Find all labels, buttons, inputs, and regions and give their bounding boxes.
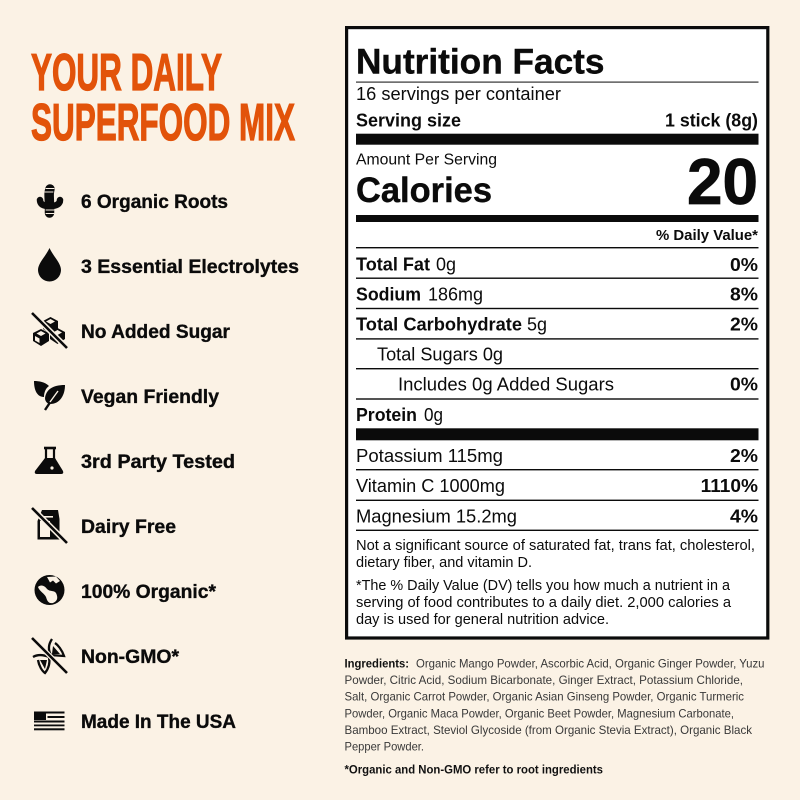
icon: ginger root — [40, 188, 60, 214]
row: total fat: 0% — [730, 254, 758, 275]
row: protein: Protein — [356, 404, 417, 425]
ingredients: Powder, Citric Acid, Sodium Bicarbonate, Ginger Extract, Potassium Chloride, — [344, 673, 743, 687]
label: Vegan Friendly: Vegan Friendly — [81, 386, 219, 408]
serving size: 1 stick (8g) — [665, 110, 758, 130]
row: total fat: 0g — [436, 254, 456, 274]
row: vitamin c — [356, 475, 758, 496]
row: added sugars: Includes 0g Added Sugars — [398, 374, 614, 395]
row: total sugars: Total Sugars 0g — [377, 344, 503, 365]
row: sodium: 186mg — [428, 284, 483, 305]
label: 100% Organic: 100% Organic* — [81, 581, 216, 603]
label: 3rd Party Tested: 3rd Party Tested — [81, 451, 235, 473]
ingredients: Salt, Organic Carrot Powder, Organic Asian Ginseng Powder, Organic Turmeric — [344, 690, 744, 704]
row: vitamin c: Vitamin C 1000mg — [356, 475, 505, 496]
daily value header: % Daily Value* — [656, 228, 758, 244]
row: magnesium: Magnesium 15.2mg — [356, 506, 517, 526]
row: total fat — [356, 254, 758, 275]
row: total fat: Total Fat — [356, 254, 430, 274]
row: potassium: Potassium 115mg — [356, 445, 503, 466]
row: potassium: 2% — [730, 445, 758, 466]
label: Dairy Free: Dairy Free — [81, 516, 176, 538]
calories: 20 — [687, 145, 758, 218]
row: magnesium: 4% — [730, 506, 758, 526]
row: total carbohydrate — [356, 314, 758, 335]
ingredients: Organic Mango Powder, Ascorbic Acid, Organic Ginger Powder, Yuzu — [416, 656, 764, 670]
row: vitamin c: 1110% — [701, 475, 758, 496]
row: protein: 0g — [424, 404, 443, 425]
row: added sugars: 0% — [730, 374, 758, 395]
row: total carbohydrate: Total Carbohydrate — [356, 314, 522, 335]
icon: vegan leaf — [34, 381, 65, 410]
label: 3 Essential Electrolytes: 3 Essential Electrolytes — [81, 256, 299, 278]
ingredients: Bamboo Extract, Steviol Glycoside (from Organic Stevia Extract), Organic Black — [344, 723, 753, 737]
panel frame — [347, 28, 768, 638]
heading: nutrition facts: Nutrition Facts — [356, 42, 604, 82]
row: potassium — [356, 445, 758, 466]
icon: no dairy carton — [32, 508, 67, 543]
footnote: not a significant source: dietary fiber, and vitamin D. — [356, 554, 532, 571]
footnote: daily value — [356, 577, 732, 628]
ingredients: Pepper Powder. — [344, 740, 424, 754]
row: added sugars — [398, 374, 758, 395]
label: Non-GMO: Non-GMO* — [81, 646, 179, 668]
ingredients: Powder, Organic Maca Powder, Organic Beet Powder, Magnesium Carbonate, — [344, 706, 734, 720]
footnote: not a significant source: Not a significant source of saturated fat, trans fat, cholesterol, — [356, 537, 755, 554]
title — [31, 44, 295, 152]
serving size: Serving size — [356, 110, 461, 130]
title: SUPERFOOD MIX — [31, 94, 295, 152]
row: magnesium — [356, 506, 758, 526]
label: Made In The USA: Made In The USA — [81, 711, 236, 733]
row: sodium: 8% — [730, 284, 758, 305]
servings per container: 16 servings per container — [356, 84, 561, 104]
icon: globe — [34, 575, 64, 605]
calories — [356, 145, 758, 218]
row: total carbohydrate: 2% — [730, 314, 758, 335]
label: No Added Sugar: No Added Sugar — [81, 321, 230, 343]
ingredients: Ingredients: — [344, 656, 409, 670]
calories: Calories — [356, 171, 492, 210]
footnote: daily value: day is used for general nutrition advice. — [356, 611, 609, 628]
panel: nutrition facts — [347, 28, 768, 638]
row: sodium: Sodium — [356, 284, 421, 305]
nutrient rows — [356, 247, 758, 531]
feature list — [32, 188, 299, 733]
serving size — [356, 110, 758, 130]
icon: non-GMO DNA — [32, 638, 67, 673]
icon: water drop — [38, 248, 61, 282]
icon: USA flag — [34, 712, 64, 730]
footnote: not a significant source — [356, 537, 755, 571]
footnote: daily value: serving of food contributes to a daily diet. 2,000 calories a — [356, 594, 732, 611]
row: total carbohydrate: 5g — [527, 314, 547, 335]
row: sodium — [356, 284, 758, 305]
icon: lab flask — [35, 448, 63, 474]
label: 6 Organic Roots: 6 Organic Roots — [81, 191, 228, 213]
footnote: organic and non-gmo: *Organic and Non-GMO refer to root ingredients — [344, 762, 603, 776]
title: YOUR DAILY — [31, 44, 222, 102]
amount per serving: Amount Per Serving — [356, 152, 497, 168]
icon: no sugar cubes — [32, 313, 67, 348]
ingredients — [344, 656, 764, 754]
footnote: daily value: *The % Daily Value (DV) tells you how much a nutrient in a — [356, 577, 731, 594]
